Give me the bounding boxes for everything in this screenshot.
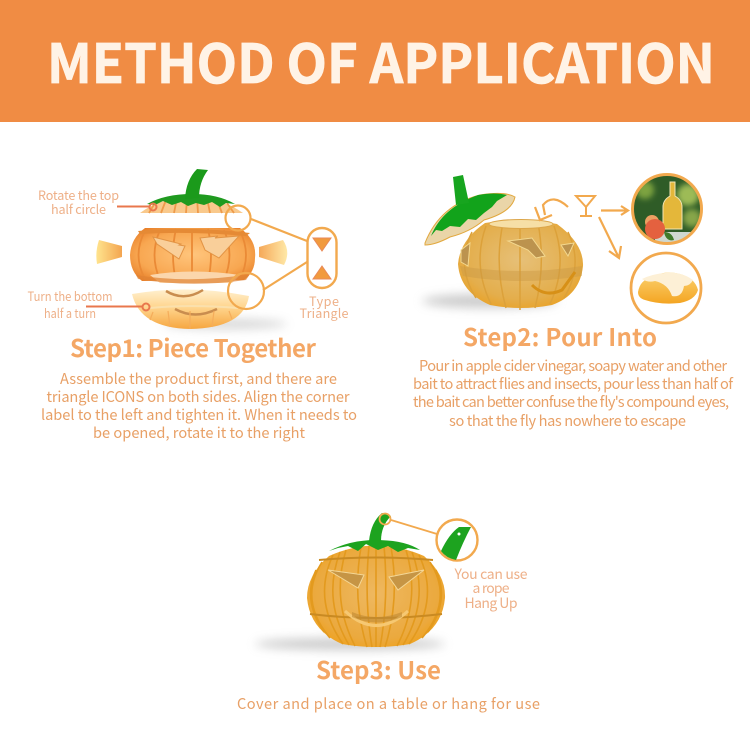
closed pumpkin [307, 546, 445, 647]
icon: cocktail glass [576, 196, 595, 216]
step 1 heading: Step1: Piece Together [70, 329, 317, 364]
green cap and stem [329, 513, 420, 552]
label: turn the bottom: half a turn [44, 303, 96, 322]
step 2 description: so that the fly has nowhere to escape [449, 410, 686, 431]
callout: stem hole zoom [380, 514, 478, 560]
label: type triangle [300, 291, 349, 322]
header banner [0, 0, 750, 122]
step 2 description: Pour in apple cider vinegar, soapy water and other [419, 355, 727, 376]
title: METHOD OF APPLICATION [47, 20, 715, 99]
panel: step 3 use [237, 513, 540, 714]
triangle icon badge [308, 228, 336, 288]
left wedge [96, 240, 122, 264]
step 2 description: the bait can better confuse the fly's compound eyes, [413, 391, 729, 412]
right wedge [259, 240, 287, 265]
label: rope hang up [454, 564, 528, 613]
shadow under pumpkin [255, 638, 445, 650]
label: rope hang up: Hang Up [464, 593, 518, 613]
shadow under pumpkin [422, 294, 558, 308]
step 2 heading: Step2: Pour Into [463, 318, 657, 353]
label: rotate the top: Rotate the top [38, 185, 119, 204]
step 1 description [41, 368, 357, 443]
label: rope hang up: a rope [472, 578, 510, 598]
label: rotate the top: half circle [51, 199, 106, 218]
callout lines to triangle icons [226, 206, 307, 309]
panel: step 2 pour into [413, 174, 734, 431]
arrows to bait options [599, 206, 628, 258]
step 1 description: triangle ICONS on both sides. Align the corner [46, 386, 350, 407]
step 2 description: bait to attract flies and insects, pour less than half of [413, 373, 734, 394]
step 1 description: be opened, rotate it to the right [93, 422, 305, 443]
step 3 description: Cover and place on a table or hang for use [237, 693, 540, 714]
label: turn the bottom [28, 286, 150, 322]
apple cider vinegar photo [632, 174, 702, 244]
open pumpkin body [458, 220, 583, 310]
label: turn the bottom: Turn the bottom [28, 286, 112, 305]
shadow under bowl [163, 319, 287, 329]
pumpkin lid [425, 175, 515, 245]
bait photo [631, 253, 701, 323]
step 1 description: label to the left and tighten it. When it needs to [41, 404, 357, 425]
step 2 description [413, 355, 734, 431]
pumpkin top half [140, 169, 243, 213]
label: type triangle: Type [309, 291, 339, 310]
label: type triangle: Triangle [300, 303, 349, 322]
step 1 description: Assemble the product first, and there are [60, 368, 337, 389]
label: rope hang up: You can use [454, 564, 528, 584]
pumpkin bottom bowl [132, 289, 249, 329]
label: rotate the top [38, 185, 156, 218]
panel: step 1 piece together [28, 169, 357, 443]
pumpkin middle section [130, 228, 255, 284]
curved pour arrow [535, 199, 568, 220]
step 3 heading: Step3: Use [316, 651, 441, 686]
